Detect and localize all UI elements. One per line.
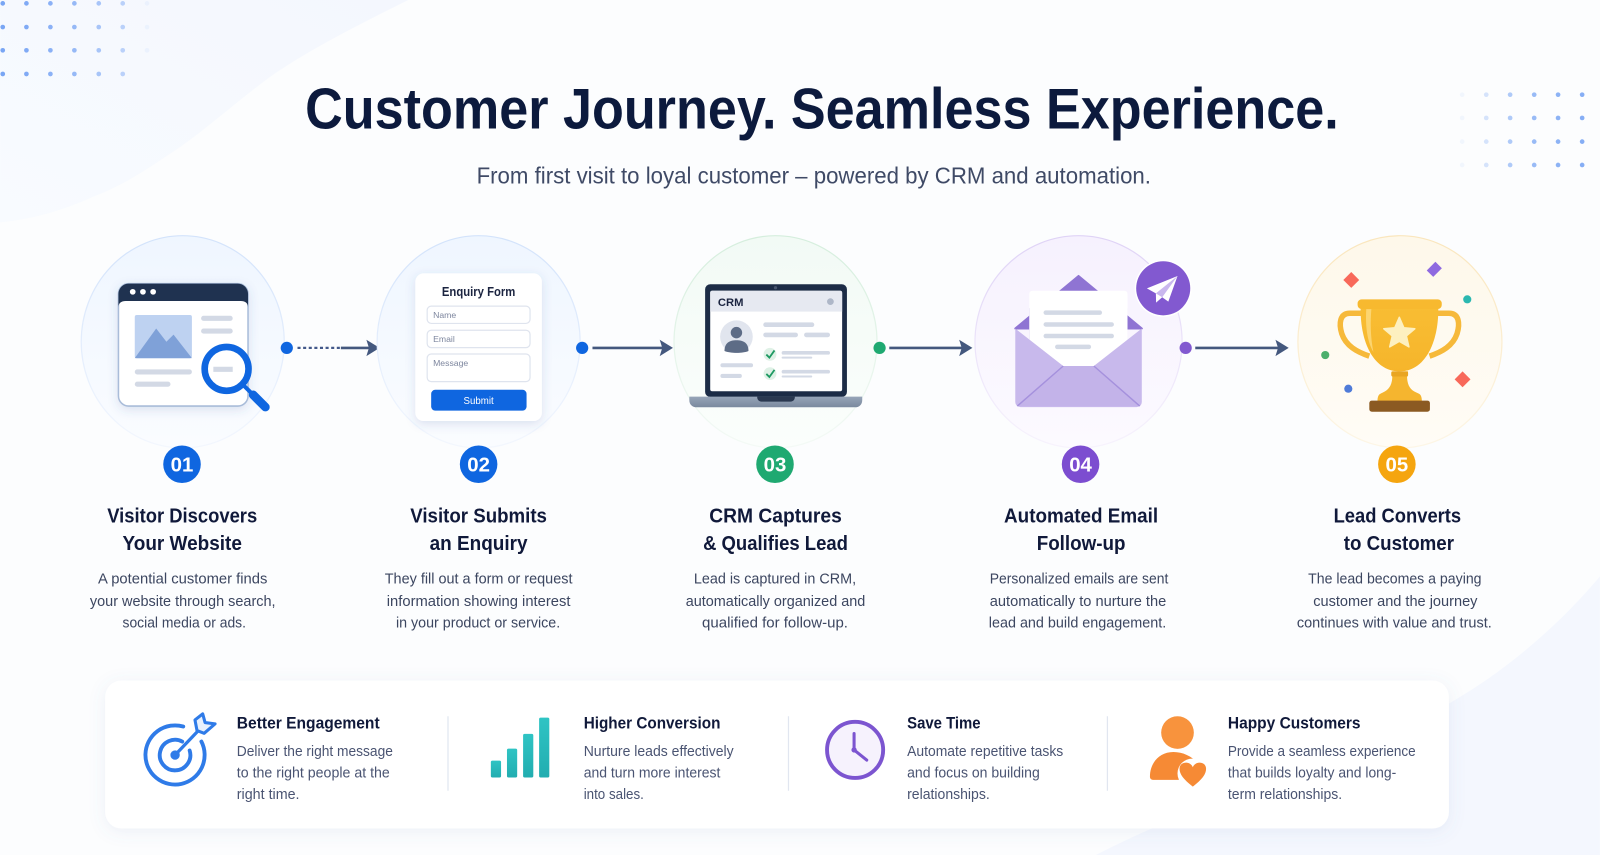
icon: enquiry form: Submit (464, 396, 494, 407)
description 3 (686, 572, 865, 631)
save time text (907, 744, 1063, 803)
description 1: your website through search, (90, 594, 276, 610)
step 1 circle (81, 236, 284, 448)
description 4 (989, 572, 1168, 631)
better engagement text (237, 744, 393, 803)
save time title: Save Time (907, 713, 981, 732)
higher conversion title: Higher Conversion (584, 713, 720, 732)
heading 5: Lead Converts (1334, 505, 1461, 527)
heading 5 (1334, 505, 1461, 555)
badge 05 (1378, 445, 1416, 483)
icon: paper plane badge (1135, 260, 1192, 317)
higher conversion text: Nurture leads effectively (584, 744, 734, 760)
badge 05: 05 (1386, 454, 1408, 476)
description 2 (385, 572, 572, 631)
happy customers title: Happy Customers (1228, 713, 1361, 732)
save time text: relationships. (907, 787, 990, 803)
dot pattern top left (0, 1, 149, 76)
badge 01: 01 (171, 454, 193, 476)
better engagement text: Deliver the right message (237, 744, 393, 760)
icon: enquiry form: Message (433, 358, 468, 368)
higher conversion text: into sales. (584, 787, 644, 803)
benefit: happy customers (1150, 713, 1416, 803)
icon: browser window (118, 284, 248, 406)
better engagement text: right time. (237, 787, 300, 803)
step 3: CRM captures lead (674, 236, 877, 631)
higher conversion text (584, 744, 734, 803)
save time text: and focus on building (907, 765, 1040, 781)
step 5: lead converts (1297, 236, 1502, 631)
arrow 2 to 3 (576, 340, 673, 356)
heading 4 (1004, 505, 1158, 555)
step 4: automated email (975, 236, 1192, 631)
step 3 circle (674, 236, 877, 448)
description 1 (90, 572, 276, 631)
heading 4: Follow-up (1037, 533, 1125, 555)
step 4 circle (975, 236, 1182, 448)
description 2: in your product or service. (396, 615, 560, 631)
icon: person with heart (1150, 716, 1207, 788)
heading 2: an Enquiry (430, 533, 528, 555)
subtitle: From first visit to loyal customer – powered by CRM and automation. (477, 163, 1151, 189)
badge 03 (756, 445, 794, 483)
description 3: Lead is captured in CRM, (694, 572, 856, 588)
description 1: A potential customer finds (98, 572, 267, 588)
heading 3 (703, 505, 848, 555)
arrow 4 to 5 (1180, 340, 1289, 356)
description 5 (1297, 572, 1492, 631)
description 1: social media or ads. (123, 615, 246, 631)
better engagement text: to the right people at the (237, 765, 390, 781)
heading 2 (410, 505, 547, 555)
heading 1 (107, 505, 257, 555)
description 4: Personalized emails are sent (990, 572, 1168, 588)
description 3: automatically organized and (686, 594, 865, 610)
description 5: The lead becomes a paying (1308, 572, 1482, 588)
icon: magnifying glass (205, 347, 265, 407)
icon: enquiry form (415, 273, 542, 421)
heading 1: Visitor Discovers (107, 505, 257, 527)
icon: envelope (1015, 276, 1142, 407)
step 2: visitor submits enquiry (377, 236, 580, 631)
icon: target with arrow (145, 714, 215, 785)
step 5 circle (1298, 236, 1502, 448)
higher conversion text: and turn more interest (584, 765, 720, 781)
save time text: Automate repetitive tasks (907, 744, 1063, 760)
step 2 circle (377, 236, 580, 448)
description 3: qualified for follow-up. (702, 615, 848, 631)
icon: clock (827, 722, 883, 778)
description 2: information showing interest (387, 594, 570, 610)
icon: laptop with CRM: CRM (718, 297, 743, 309)
title: Customer Journey. Seamless Experience. (305, 78, 1339, 142)
description 4: lead and build engagement. (989, 615, 1166, 631)
arrow 3 to 4 (873, 340, 972, 356)
step 1: visitor discovers website (81, 236, 284, 631)
icon: trophy (1340, 299, 1459, 412)
badge 03: 03 (764, 454, 786, 476)
icon: enquiry form: Name (433, 310, 456, 320)
heading 3: & Qualifies Lead (703, 533, 848, 555)
badge 02: 02 (467, 454, 490, 476)
happy customers text (1228, 744, 1416, 803)
icon: enquiry form: Enquiry Form (442, 284, 515, 299)
description 2: They fill out a form or request (385, 572, 572, 588)
badge 04: 04 (1069, 454, 1093, 476)
arrow 1 to 2 (281, 340, 380, 356)
badge 02 (460, 445, 497, 483)
benefit: higher conversion (491, 713, 734, 803)
description 4: automatically to nurture the (990, 594, 1166, 610)
heading 5: to Customer (1344, 533, 1454, 555)
happy customers text: that builds loyalty and long- (1228, 765, 1396, 781)
icon: enquiry form: Email (433, 334, 455, 344)
heading 3: CRM Captures (709, 505, 842, 527)
icon: laptop with CRM (689, 284, 862, 407)
description 5: continues with value and trust. (1297, 615, 1492, 631)
description 5: customer and the journey (1313, 594, 1478, 610)
confetti (1321, 262, 1471, 393)
heading 2: Visitor Submits (410, 505, 547, 527)
better engagement title: Better Engagement (237, 713, 380, 732)
badge 04 (1062, 445, 1099, 483)
benefit: better engagement (145, 713, 393, 803)
happy customers text: Provide a seamless experience (1228, 744, 1416, 760)
heading 1: Your Website (123, 533, 242, 555)
badge 01 (163, 445, 201, 483)
icon: bar chart (491, 718, 549, 778)
panel: benefits (105, 681, 1449, 828)
benefit: save time (827, 713, 1063, 803)
happy customers text: term relationships. (1228, 787, 1342, 803)
heading 4: Automated Email (1004, 505, 1158, 527)
dot pattern top right (1460, 92, 1584, 167)
